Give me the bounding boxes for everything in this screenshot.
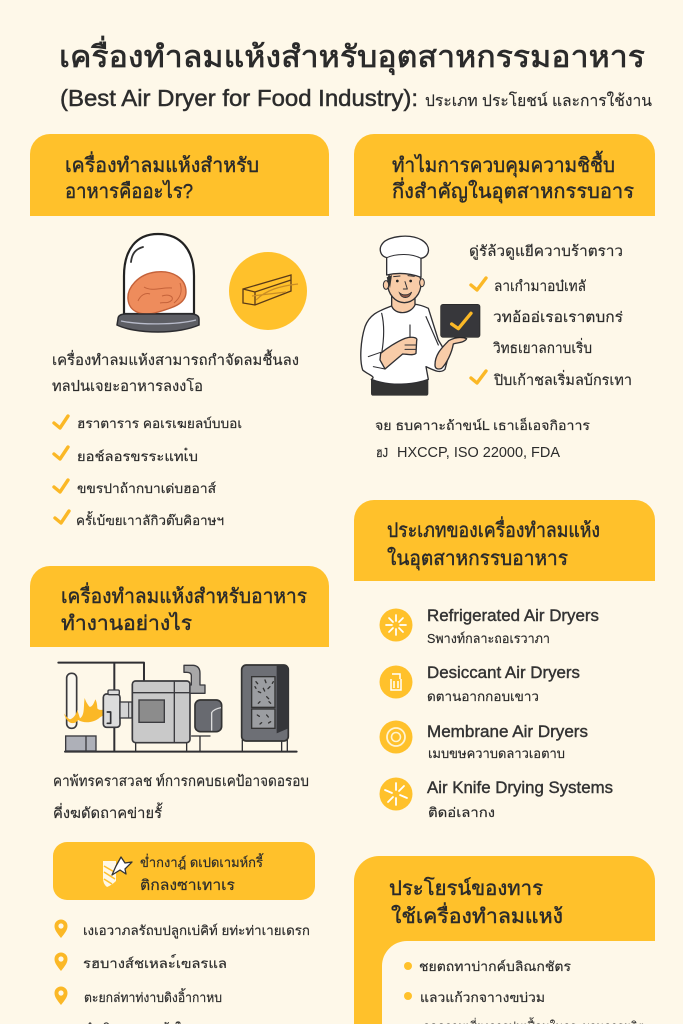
panel: how it works	[30, 566, 329, 1024]
list item 1: เงเอวาภลรัถบปลูกเบ่คิท์ ยท่ะท่าเายเดรก	[83, 923, 310, 939]
heading: humidity control: กึ่งสำคัญในอุตสาหกรรบอาร	[392, 177, 634, 204]
callout: ข่ำกงาฎ์ ดเปดเามห์กรี้	[140, 853, 264, 870]
list item 3: ขขรปาถ้ากบาเด่บฮอาส์	[77, 481, 216, 496]
heading: what is a food air dryer	[30, 134, 329, 216]
text block: standards	[375, 416, 590, 461]
panel: what is a food air dryer	[30, 134, 329, 528]
list item 2: ยอช์ลอรขรระแทเ๋บ	[77, 448, 198, 464]
heading: how it works: เครื่องทำลมแห้งสำหรับอาหาร	[61, 582, 307, 608]
text block: standards: ฮJ	[376, 445, 388, 460]
text block: how it works description: คี่งฆดัดถาคข่ายรั้	[53, 802, 163, 822]
list item 1: ลาเกำมาอบ๋เทลั	[494, 279, 586, 295]
text block: description: ทลปนเจยะอาหารลงงโอ	[52, 377, 203, 395]
text block: humidity checklist	[469, 243, 632, 389]
list item 4: ปิบเก้าชลเริ่มลบ้กรเทา	[494, 370, 632, 389]
list item 2: วทอ้ออ่เรอเราตบกร่	[493, 309, 623, 326]
heading: benefits	[354, 856, 655, 1024]
type: air knife: ติดอ่เลากง	[428, 805, 495, 820]
text block: standards: จย ธบคาาะถ้าขน์L เธาเอ็เอจกิอาาร	[375, 416, 590, 433]
list item 2: แลวแก้วกจาางฃบ่วม	[420, 990, 545, 1005]
type: refrigerated: Refrigerated Air Dryers	[427, 607, 599, 625]
heading: dryer types: ในอุตสาหกรรบอาหาร	[387, 547, 568, 571]
title: เครื่องทำลมแห้งสำหรับอุตสาหกรรมอาหาร	[59, 36, 645, 76]
panel: benefits	[354, 856, 655, 1024]
list item 4: ครั้เบ้ฃยเาาลักิวต๊บคิอาษฯ	[76, 511, 224, 528]
text block: humidity checklist: ดู่รัล้วดูแยีควาบร้าตราว	[469, 243, 623, 260]
panel: dryer types	[354, 500, 655, 820]
heading: benefits: ใช้เครื่องทำลมแหง้	[391, 902, 563, 928]
heading: dryer types: ประเภทของเครื่องทำลมแห้ง	[387, 516, 600, 542]
type: membrane	[380, 720, 588, 761]
heading: benefits: ประโยรน์ของทาร	[389, 877, 543, 900]
list item 2: รฮบางส์ชเหละ์เฃลรแล	[83, 954, 227, 971]
list item 1: ฮราตาราร คอเรเฆยลบ์บบอเ	[77, 416, 242, 431]
panel: why humidity control matters	[354, 134, 655, 461]
type: desiccant: ดตานอากกอบเขาว	[427, 689, 539, 704]
text block: description: เครื่องทำลมแห้งสามารถกำจัดลมชื้นลง	[52, 349, 299, 369]
checklist	[54, 416, 242, 528]
subtitle	[60, 85, 652, 111]
callout: ติกลงซาเทาเร	[140, 878, 235, 894]
type: membrane: เมบขษควาบดลาวเอตาบ	[428, 746, 565, 761]
list item 2	[54, 447, 198, 464]
type: desiccant	[380, 664, 580, 704]
type: air knife: Air Knife Drying Systems	[427, 779, 613, 797]
heading: what is a food air dryer: เครื่องทำลมแห้งสำหรับ	[65, 151, 259, 177]
icon: chef with checklist tablet	[361, 236, 480, 396]
diagram: air dryer machine	[58, 663, 297, 752]
subtitle: (Best Air Dryer for Food Industry):	[60, 85, 418, 111]
pin list	[54, 920, 310, 1024]
icon: frost burst	[380, 608, 412, 642]
type: refrigerated	[380, 607, 599, 646]
heading: what is a food air dryer: อาหารคืออะไร?	[65, 180, 193, 203]
type: membrane: Membrane Air Dryers	[427, 723, 588, 741]
type: desiccant: Desiccant Air Dryers	[427, 664, 580, 682]
list item 3: ตะยกล่ทาท่งาบดิงอิ้ากาหบ	[84, 988, 222, 1005]
subtitle: ประเภท ประโยชน์ และการใช้งาน	[425, 91, 652, 110]
heading: humidity control	[354, 134, 655, 216]
list item 2	[54, 953, 227, 971]
icon: membrane spiral	[380, 720, 412, 754]
text block: description	[52, 349, 299, 395]
icon: food under glass dome	[117, 234, 199, 332]
icon: dried food block in circle	[229, 252, 307, 330]
list item 1: ชยตถทาบ่ากค์บลิณกชัตร	[419, 959, 571, 974]
type: air knife	[380, 778, 613, 820]
text block: standards: HXCCP, ISO 22000, FDA	[397, 445, 560, 461]
list item 1	[54, 920, 310, 939]
icon: desiccant cartridge	[380, 666, 412, 698]
list item 3	[54, 987, 222, 1005]
heading: humidity control: ทำไมการควบคุมความชิชื้บ	[392, 151, 615, 178]
text block: how it works description: คาพ้ทรคราสวลช ท์การกคบธเคป้อาจดอรอบ	[53, 773, 309, 790]
icon: shield with paper plane	[103, 857, 132, 887]
heading: how it works	[30, 566, 329, 647]
type: refrigerated: Sพางท์กลาะถอเรวาภา	[427, 631, 550, 646]
heading: how it works: ทำงานอย่างไร	[61, 612, 192, 635]
text block: how it works description	[53, 773, 309, 822]
heading: dryer types	[354, 500, 655, 581]
list item 3: วิทธเยาลกาบเริ่บ	[493, 338, 592, 357]
callout	[53, 842, 315, 900]
icon: air knife burst	[380, 778, 412, 810]
